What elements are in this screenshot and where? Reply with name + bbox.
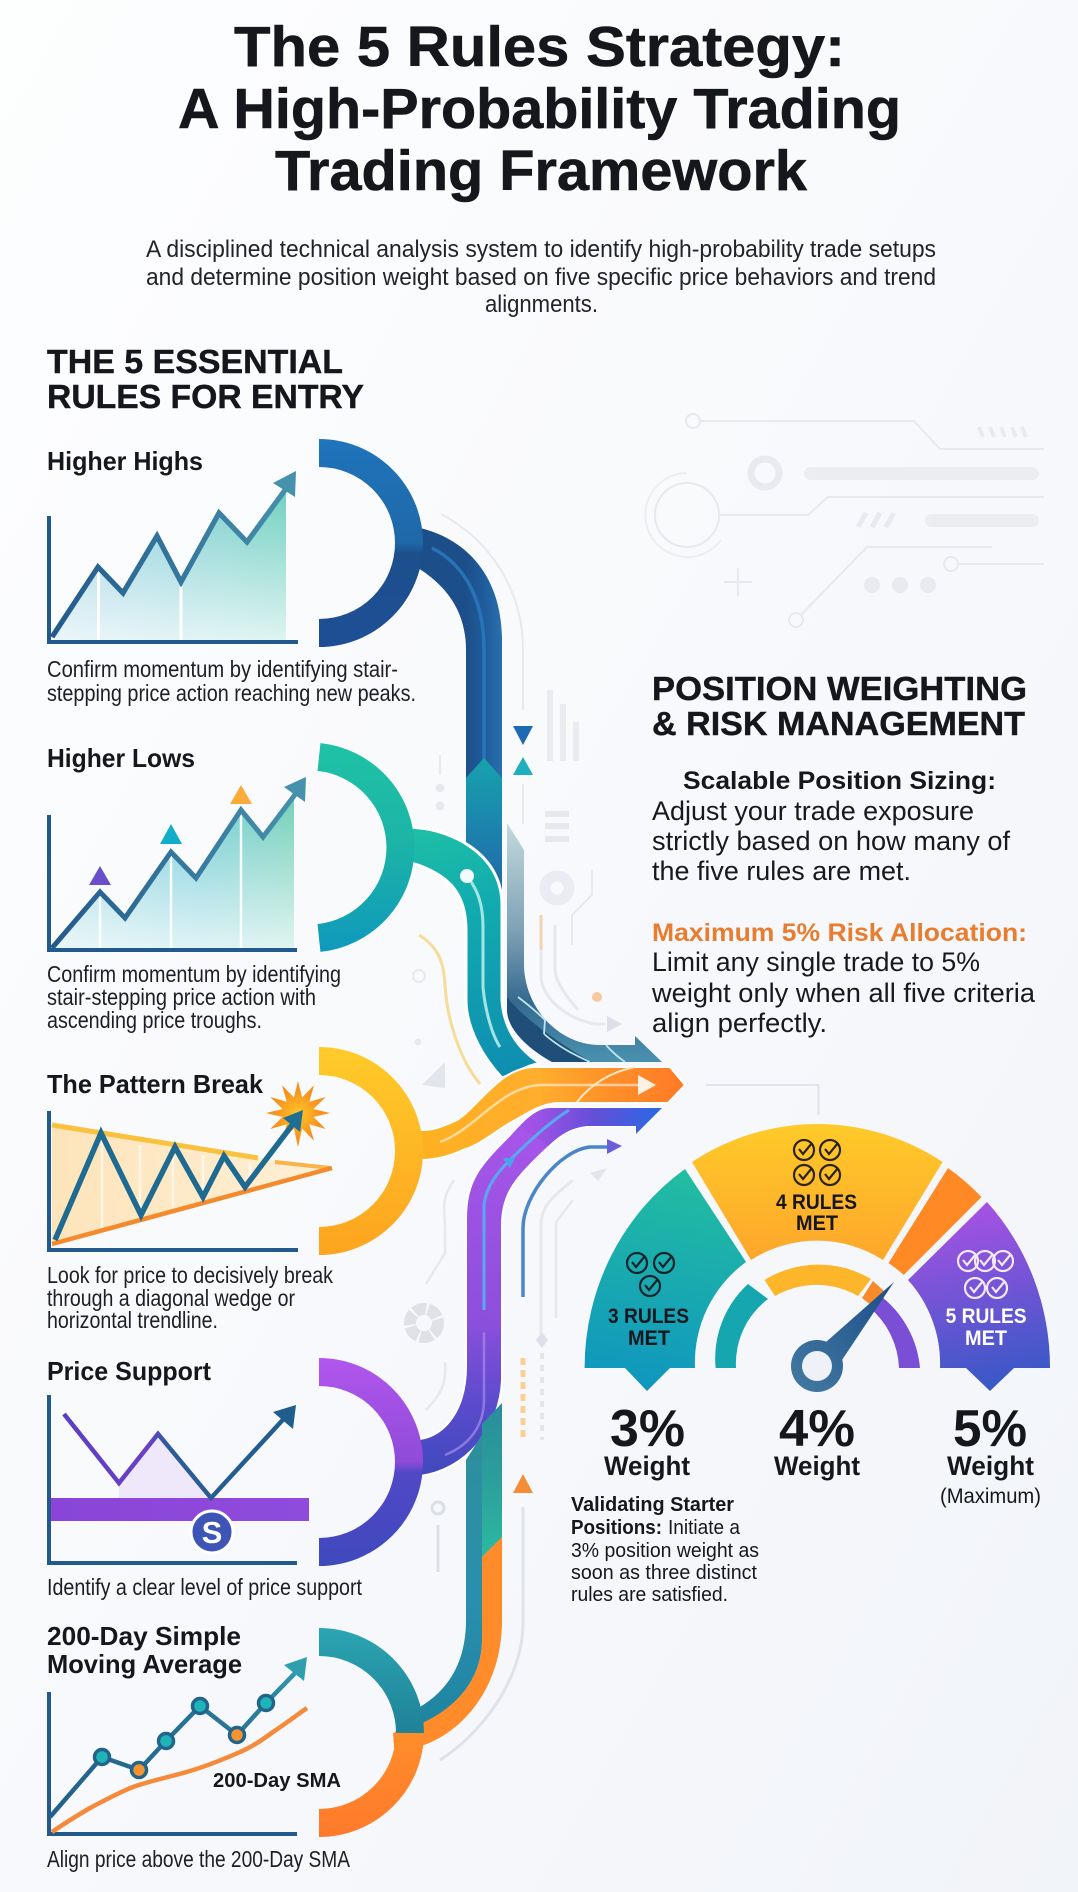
icon: four checks: [794, 1140, 840, 1185]
text block: scalable position sizing: strictly based on how many of: [652, 826, 1010, 856]
rule title: Moving Average: [47, 1649, 242, 1679]
title: Trading Framework: [275, 139, 807, 203]
chart: higher highs: [49, 471, 298, 642]
heading: position weighting: POSITION WEIGHTING: [652, 670, 1027, 707]
stat: 4 percent weight: Weight: [774, 1451, 860, 1481]
text block: scalable position sizing: Adjust your trade exposure: [652, 796, 974, 826]
rule description: Identify a clear level of price support: [47, 1574, 363, 1600]
rule description: stair-stepping price action with: [47, 984, 316, 1010]
gauge segment: 3 rules met: [585, 1169, 746, 1391]
stat: 5 percent weight: 5%: [953, 1400, 1027, 1458]
rule description: Confirm momentum by identifying: [47, 961, 341, 987]
ring: teal rule connector: [319, 757, 400, 938]
chart: price support: S: [202, 1515, 222, 1550]
rule description: [47, 961, 341, 1033]
text block: validating starter positions: soon as three distinct: [571, 1562, 757, 1584]
segment label: 4 RULES: [776, 1191, 857, 1214]
chart: pattern break: [49, 1081, 332, 1250]
gauge segment: orange: [888, 1168, 982, 1275]
stat: 4 percent weight: [774, 1400, 860, 1481]
stat: 5 percent weight: Weight: [947, 1451, 1034, 1481]
stat: 3 percent weight: 3%: [610, 1400, 685, 1458]
title: A High-Probability Trading: [178, 77, 901, 141]
rule description: ascending price troughs.: [47, 1007, 262, 1033]
connector to gauge: [706, 1085, 818, 1115]
icon: orange up triangle: [513, 1474, 533, 1493]
stat: 4 percent weight: 4%: [779, 1400, 855, 1458]
icon: five checks: [958, 1251, 1013, 1298]
text block: scalable position sizing: the five rules are met.: [652, 856, 911, 886]
ring: yellow rule connector: [319, 1061, 409, 1241]
flow stem: yellow to orange arrow: [400, 1067, 685, 1160]
panel: rule 1 higher highs: [47, 446, 416, 706]
text block: validating starter positions: [571, 1494, 759, 1606]
text block: maximum risk allocation: [651, 919, 1036, 1038]
segment label: MET: [628, 1327, 670, 1350]
rule title: 200-Day Simple: [47, 1621, 241, 1651]
thin blue arrow: [523, 1139, 622, 1297]
heading: the 5 essential rules: RULES FOR ENTRY: [47, 378, 364, 415]
chart: moving average: 200-Day SMA: [213, 1770, 341, 1792]
stat: 5 percent weight: [940, 1400, 1041, 1508]
rule description: Look for price to decisively break: [47, 1262, 333, 1288]
segment label: [776, 1191, 857, 1235]
gauge: [585, 1124, 1050, 1392]
rule description: [47, 656, 416, 706]
panel: rule 5 moving average: [47, 1621, 351, 1872]
flow stem: teal: [400, 826, 540, 1078]
ring: teal and orange rule connector: [319, 1642, 410, 1823]
text block: maximum risk allocation: align perfectly.: [652, 1008, 827, 1038]
text block: validating starter positions: Initiate a: [668, 1517, 741, 1539]
icon: blue down triangle: [513, 726, 533, 745]
gauge inner arcs: [715, 1265, 920, 1368]
text block: maximum risk allocation: Maximum 5% Risk Allocation:: [652, 919, 1027, 947]
gauge needle: [791, 1282, 894, 1392]
subtitle: A disciplined technical analysis system to identify high-probability trade setups: [146, 236, 936, 263]
stat: 3 percent weight: Weight: [604, 1451, 690, 1481]
gauge segment: 4 rules met: [692, 1124, 943, 1260]
heading: position weighting: & RISK MANAGEMENT: [652, 705, 1025, 742]
chart: higher lows: [49, 777, 306, 950]
text block: validating starter positions: 3% position weight as: [571, 1540, 759, 1562]
segment label: MET: [965, 1327, 1007, 1350]
rule title: The Pattern Break: [47, 1069, 264, 1099]
subtitle: [146, 236, 936, 318]
segment label: [608, 1305, 689, 1350]
text block: validating starter positions: Positions:: [571, 1517, 662, 1539]
flow stem: blue: [418, 528, 502, 890]
icon: teal up triangle: [513, 757, 533, 775]
title: The 5 Rules Strategy:: [234, 15, 845, 79]
subtitle: and determine position weight based on five specific price behaviors and trend: [146, 264, 936, 291]
gauge segment: 5 rules met: [908, 1202, 1050, 1391]
heading: the 5 essential rules: [47, 343, 364, 415]
text block: maximum risk allocation: weight only when all five criteria: [651, 978, 1036, 1008]
chart: moving average: [49, 1657, 341, 1834]
rule title: [47, 1621, 242, 1679]
text block: validating starter positions: Validating Starter: [571, 1494, 734, 1516]
rule title: Higher Lows: [47, 743, 195, 773]
segment label: 3 RULES: [608, 1305, 689, 1328]
rule description: horizontal trendline.: [47, 1307, 218, 1333]
flow stem: purple to blue arrow: [400, 1108, 662, 1478]
rule description: through a diagonal wedge or: [47, 1285, 295, 1311]
title: [178, 15, 901, 203]
central decorative lines and markers: [410, 514, 622, 1760]
background circuit decoration: [645, 414, 1044, 627]
text block: scalable position sizing: Scalable Position Sizing:: [683, 767, 996, 795]
text block: validating starter positions: rules are satisfied.: [571, 1584, 728, 1606]
text block: scalable position sizing: [652, 767, 1010, 886]
panel: rule 2 higher lows: [47, 743, 341, 1033]
text block: maximum risk allocation: Limit any single trade to 5%: [652, 947, 980, 977]
flow ribbon: grey to dark blue arrow: [507, 823, 662, 1062]
heading: the 5 essential rules: THE 5 ESSENTIAL: [47, 343, 343, 380]
stat: 3 percent weight: [604, 1400, 690, 1481]
stat: 5 percent weight: (Maximum): [940, 1485, 1041, 1508]
ring: blue rule connector: [319, 453, 409, 633]
rule description: Align price above the 200-Day SMA: [47, 1846, 351, 1872]
rule title: Higher Highs: [47, 446, 203, 476]
panel: rule 3 pattern break: [47, 1069, 333, 1333]
panel: rule 4 price support: [47, 1356, 363, 1600]
rule title: Price Support: [47, 1356, 211, 1386]
subtitle: alignments.: [485, 291, 598, 318]
rule description: [47, 1262, 333, 1333]
chart: price support: [49, 1395, 309, 1563]
heading: position weighting: [652, 670, 1027, 742]
segment label: 5 RULES: [946, 1305, 1027, 1328]
icon: three checks: [627, 1253, 674, 1296]
flow stem: teal and orange: [393, 1403, 502, 1760]
ring: purple rule connector: [319, 1372, 409, 1552]
rule description: stepping price action reaching new peaks.: [47, 680, 416, 706]
segment label: [946, 1305, 1027, 1350]
icon: starburst: [266, 1081, 330, 1147]
rule description: Confirm momentum by identifying stair-: [47, 656, 398, 682]
segment label: MET: [796, 1212, 838, 1235]
